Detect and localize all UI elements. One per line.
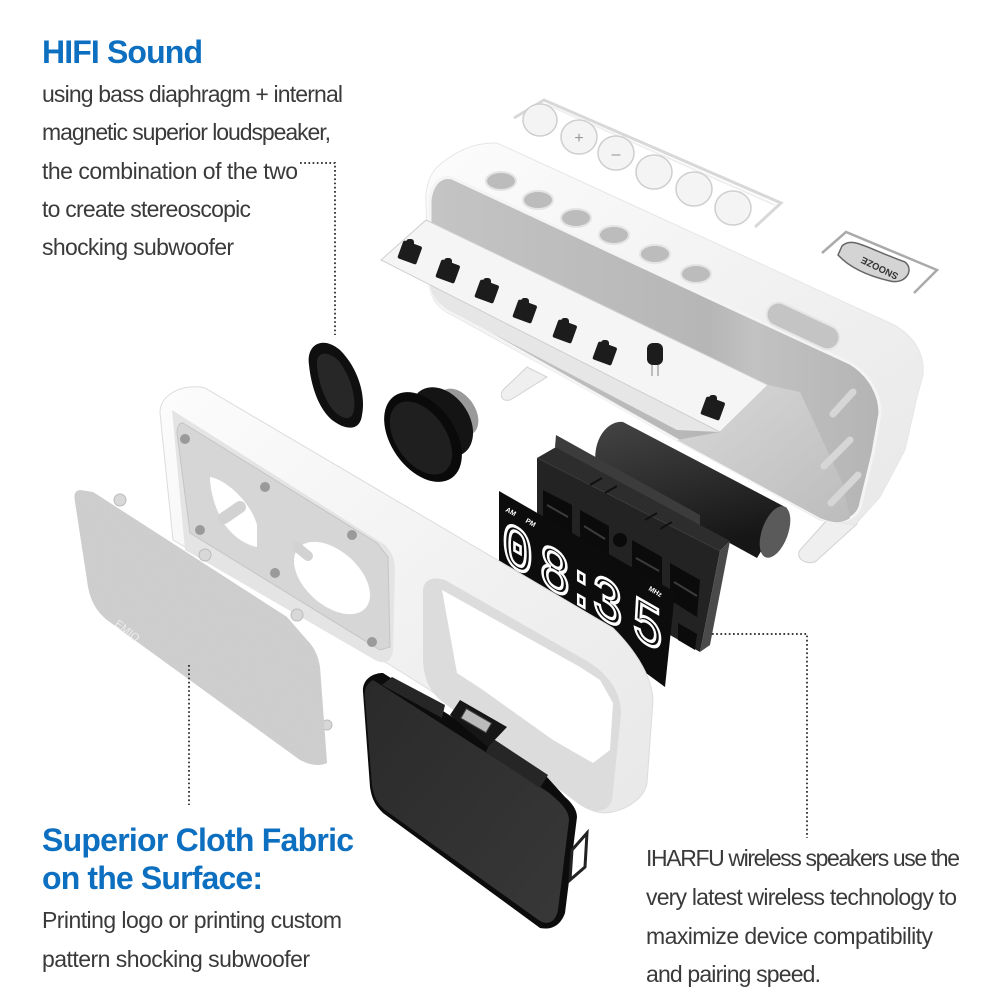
- printed circuit board with switches: [381, 220, 768, 432]
- text block: wireless description: maximize device compatibility: [646, 923, 934, 949]
- speaker passive radiator: [309, 343, 363, 428]
- battery: [595, 422, 796, 562]
- text block: HIFI description: [42, 81, 343, 260]
- callout line: fabric: [188, 665, 190, 805]
- text block: HIFI description: the combination of the two: [42, 158, 298, 184]
- cloth fabric panel: EMIO: [112, 618, 142, 645]
- button membrane strip: –: [612, 146, 621, 163]
- loudspeaker driver: [368, 375, 487, 496]
- rear housing: white case: [381, 143, 923, 525]
- text block: HIFI description: shocking subwoofer: [42, 234, 234, 260]
- speaker grille badge: snooze button: SNOOZE: [859, 254, 900, 281]
- callout line: HIFI to speaker cap: [300, 163, 335, 335]
- text block: wireless description: [646, 845, 960, 987]
- heading: Superior Cloth Fabric: Superior Cloth Fabric: [42, 822, 354, 858]
- callout line: wireless: [712, 634, 807, 838]
- text block: fabric description: Printing logo or printing custom: [42, 907, 342, 933]
- text block: HIFI description: to create stereoscopic: [42, 196, 251, 222]
- heading: Superior Cloth Fabric: [42, 822, 354, 896]
- LED digital display: PM: [524, 518, 537, 529]
- LED digital display: 08:35: [502, 510, 663, 672]
- text block: fabric description: pattern shocking subwoofer: [42, 946, 310, 972]
- LED digital display: MHz: [647, 586, 663, 599]
- button membrane strip: +: [574, 130, 584, 147]
- text block: HIFI description: magnetic superior loudspeaker,: [42, 119, 331, 145]
- heading: HIFI Sound: HIFI Sound: [42, 34, 203, 70]
- stands: metal feet: [501, 367, 857, 563]
- text block: fabric description: [42, 907, 342, 972]
- cloth fabric panel: [75, 490, 332, 765]
- text block: wireless description: IHARFU wireless speakers use the: [646, 845, 960, 871]
- speaker grille badge: snooze button: [822, 232, 937, 293]
- heading: Superior Cloth Fabric: on the Surface:: [42, 860, 263, 896]
- text block: wireless description: and pairing speed.: [646, 961, 821, 987]
- front frame: white panel with openings: [160, 387, 653, 813]
- text block: wireless description: very latest wireless technology to: [646, 884, 957, 910]
- LED digital display: AM: [504, 507, 517, 518]
- button membrane strip: [514, 100, 781, 227]
- text block: HIFI description: using bass diaphragm + internal: [42, 81, 343, 107]
- display circuit board: [537, 435, 730, 652]
- black back cover: [363, 673, 587, 929]
